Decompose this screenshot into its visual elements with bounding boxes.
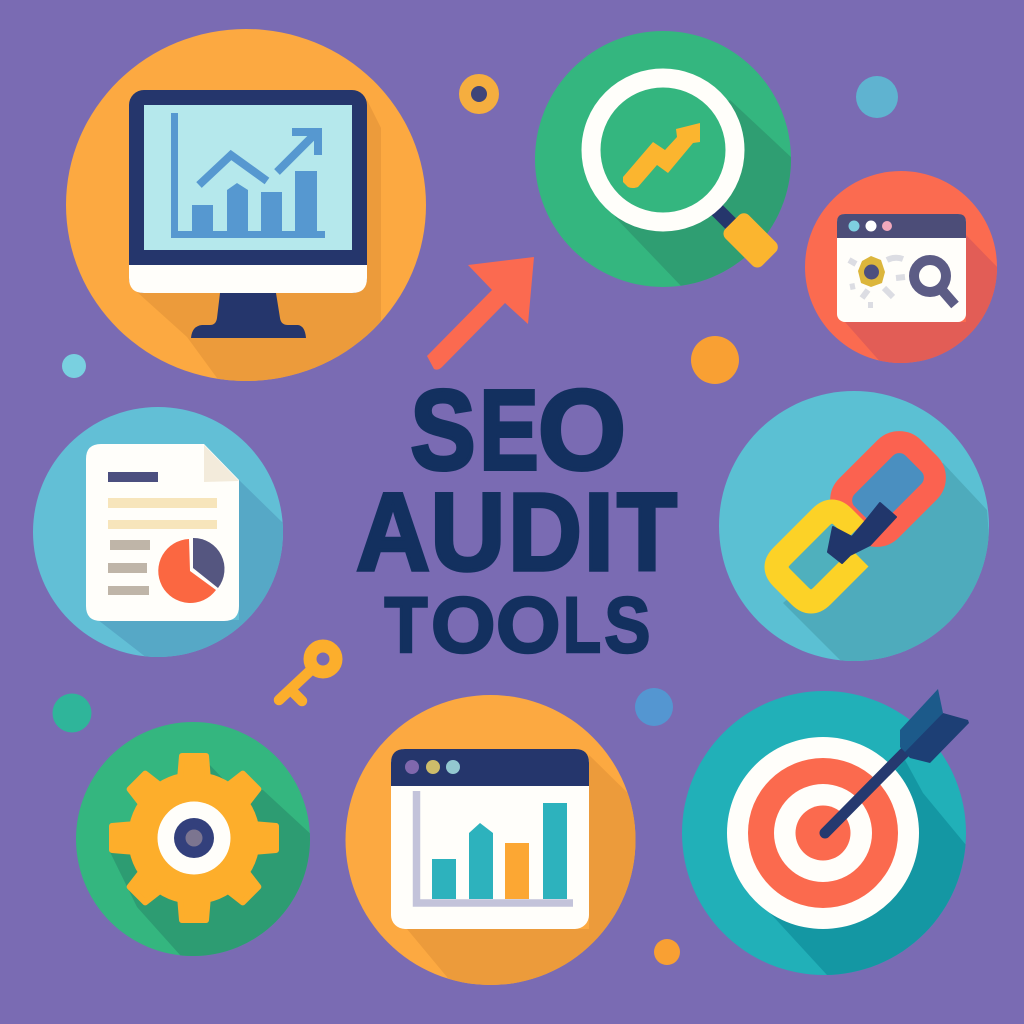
title: E <box>480 367 538 493</box>
panel: report document icon <box>33 407 290 670</box>
panel: monitor analytics icon <box>66 29 426 420</box>
title: T <box>384 580 428 669</box>
decorative dots <box>52 76 898 965</box>
icon: bug and search <box>849 256 955 305</box>
arrow: large coral arrow <box>427 257 534 370</box>
icon: browser window <box>391 749 589 929</box>
title: I <box>584 471 614 594</box>
pie chart <box>158 538 225 603</box>
icon: magnifier handle <box>716 209 781 270</box>
panel: browser inspection icon <box>805 171 1000 375</box>
title: O <box>538 367 626 493</box>
title: O <box>431 580 496 669</box>
title <box>356 367 677 669</box>
panel: chain link icon <box>719 391 989 661</box>
title: U <box>430 471 505 594</box>
icon: target <box>727 737 919 929</box>
title: S <box>410 367 476 493</box>
panel: browser bar chart icon <box>346 695 640 1000</box>
icon: monitor stand <box>191 293 306 338</box>
title: T <box>617 471 677 594</box>
icon: monitor body <box>129 90 367 293</box>
title: L <box>563 580 601 669</box>
text lines <box>108 472 217 595</box>
title: O <box>496 580 560 669</box>
icon: browser window <box>837 214 966 322</box>
icon: document page <box>86 444 239 621</box>
title: S <box>604 580 650 669</box>
icon: gear <box>112 756 276 920</box>
chart: bars <box>416 791 573 903</box>
panel: magnifier growth icon <box>535 31 800 300</box>
panel: target icon <box>682 689 970 1000</box>
icon: arrow connector <box>828 503 896 563</box>
title: A <box>356 471 430 594</box>
chart: monitor screen <box>144 105 352 250</box>
title: D <box>508 471 582 594</box>
icon: red link <box>833 434 943 544</box>
icon: arrow <box>825 689 969 833</box>
panel: gear icon <box>76 722 315 965</box>
icon: zigzag growth arrow <box>623 123 700 188</box>
icon: key <box>279 646 336 701</box>
icon: magnifier lens <box>591 78 735 222</box>
icon: yellow link <box>776 512 860 602</box>
